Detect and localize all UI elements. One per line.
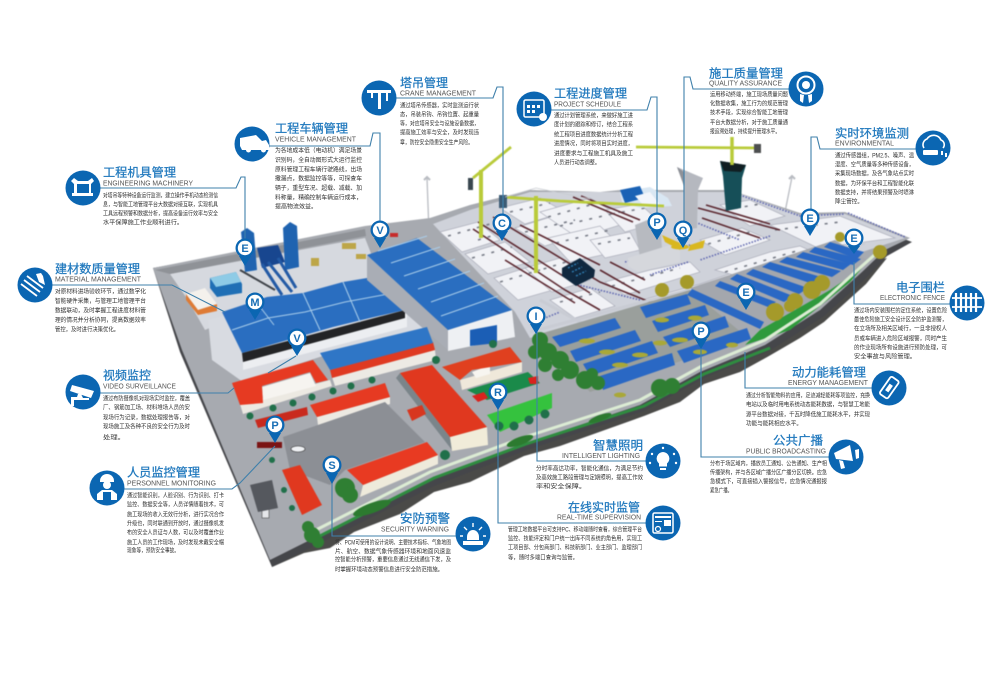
subheading: VEHICLE MANAGEMENT — [275, 136, 357, 144]
red corner block — [282, 465, 322, 515]
body text — [400, 102, 480, 146]
blue and red dormitory — [320, 327, 436, 386]
map pin: E environmental: E — [806, 213, 814, 225]
body text: 通过智能识别，人脸识别、行为识别、打卡 — [127, 492, 224, 500]
map pin: E energy — [736, 282, 756, 310]
body text: 人员进行动态调整。 — [554, 158, 600, 166]
heading: 智慧照明 — [593, 438, 643, 452]
map pin: S security — [322, 456, 342, 484]
pad rivets — [448, 203, 840, 302]
subheading: ENVIRONMENTAL — [835, 140, 894, 148]
yellow equipment — [662, 235, 705, 251]
heading: 人员监控管理 — [127, 464, 200, 480]
olive trees — [655, 232, 887, 321]
body text: 通过布防摄像机对现场实时监控，覆盖 — [103, 394, 190, 402]
subheading: ELECTRONIC FENCE — [880, 295, 945, 302]
panel: material management — [18, 261, 146, 334]
solar field B ground — [690, 240, 870, 335]
main road — [530, 243, 865, 355]
icon: light bulb — [646, 444, 680, 478]
gray concrete tower P — [628, 215, 680, 272]
map pin: M material: M — [250, 297, 260, 309]
heading: 施工质量管理 — [709, 66, 783, 80]
panel: vehicle management — [234, 120, 362, 210]
icon: alarm beacon — [456, 516, 490, 552]
concrete yard — [170, 238, 408, 330]
body text: 现场施工及各种不良的安全行为及时 — [103, 422, 190, 430]
subheading: INTELLIGENT LIGHTING — [562, 453, 640, 460]
body text — [275, 146, 362, 210]
body text — [103, 394, 190, 442]
body text: 技术手段，实现综合智能工地管理 — [710, 108, 788, 116]
body text: 提高施工效率与安全，及时发现违 — [400, 128, 479, 136]
precast field — [433, 192, 905, 338]
body text: 化数据收集，施工行为的规范管理 — [710, 100, 788, 108]
map pin: M material — [246, 292, 264, 320]
map pin: E fence — [844, 228, 864, 254]
body text: 管理工地数据平台可支持PC、移动端随时查看，综合管理平台 — [508, 526, 642, 534]
map pin: P broadcasting: P — [697, 326, 705, 338]
red canopy — [255, 407, 308, 428]
subheading: ENERGY MANAGEMENT — [788, 380, 869, 387]
soil edge — [272, 258, 887, 567]
large arched hall — [367, 236, 515, 351]
body text: 电站以及临时用电系统动态能耗数据，与智慧工地能 — [746, 400, 870, 408]
body text: 原料管理工程车辆行驶路线，出场 — [275, 166, 362, 174]
subheading: PUBLIC BROADCASTING — [746, 448, 826, 456]
icon: calendar — [516, 92, 552, 126]
body text — [554, 112, 633, 166]
body text: 水平保障施工作业顺利进行。 — [103, 218, 183, 226]
subheading: SECURITY WARNING — [381, 526, 449, 534]
panel: energy management — [746, 364, 906, 428]
icon: megaphone — [828, 440, 864, 474]
map pin: V vehicle — [370, 220, 390, 248]
map pin: E machinery — [236, 238, 254, 266]
map pin: R real-time: R — [494, 387, 502, 399]
map pin: P personnel — [266, 416, 284, 443]
heading: 工程车辆管理 — [275, 120, 348, 136]
body text — [55, 288, 146, 334]
heading: 实时环境监测 — [835, 126, 909, 140]
body text: 理的情况并分析协同，提高数据效率 — [55, 316, 146, 324]
body text: 运用移动终端，施工现场质量问题 — [710, 90, 788, 98]
parked car — [262, 446, 305, 518]
map pin: V video: V — [293, 333, 301, 345]
blue solar rows — [552, 242, 864, 390]
solar module block — [562, 258, 595, 286]
map pin: C crane: C — [498, 218, 506, 230]
body text: 撒漏点，数据监控等等，可探查车 — [275, 174, 362, 182]
body text: 对原材料进场验收环节，通过数字化 — [55, 288, 146, 296]
body text: 传播架构，并与各区域广播分区广播分区切换。应急 — [710, 468, 827, 476]
subheading: VIDEO SURVEILLANCE — [103, 384, 176, 390]
panel: real-time supervision — [508, 500, 680, 562]
body text: 急模式下，可直接插入警报信号，应急情况通报报 — [710, 478, 827, 486]
dark teal cooling tower — [720, 161, 746, 211]
panel: quality assurance — [709, 66, 824, 136]
dark pavement — [250, 480, 278, 512]
panel: crane management — [362, 75, 480, 146]
body text: 数据支持，并将结果预警及时喷淋 — [835, 188, 914, 196]
heading: 塔吊管理 — [400, 75, 448, 90]
body text: 分布于场区域内，播放员工通知、公告通知、生产相 — [710, 460, 827, 468]
isometric construction site illustration — [153, 137, 912, 567]
body text: 通过场内安装围栏的定位系统，设置危险 — [854, 306, 948, 314]
body text: 辆子，重型车况、超载、减载、加 — [275, 184, 362, 192]
icon: machinery — [66, 170, 100, 206]
body text: 识别码，全自动图形式大运行监控 — [275, 156, 362, 164]
material shed — [222, 277, 407, 370]
heading: 公共广播 — [773, 434, 823, 448]
precast pads — [440, 198, 895, 318]
heading: 建材数质量管理 — [55, 261, 140, 276]
panel: public broadcasting — [710, 434, 864, 494]
icon: quality badge — [788, 72, 824, 106]
icon: monitor screen — [646, 506, 680, 540]
subheading: MATERIAL MANAGEMENT — [55, 276, 142, 284]
icon: tower crane — [362, 80, 396, 116]
icon: material steel bars — [18, 268, 52, 302]
body text: 片、航空、数据气象传感器环境和地面风速监 — [335, 548, 451, 556]
body text: 湿度、空气质量等多种传感设备， — [835, 160, 914, 168]
body text: 的作业现场所有设施进行预防处理，可 — [854, 344, 947, 352]
subheading: PROJECT SCHEDULE — [554, 102, 621, 108]
map pin: V vehicle: V — [376, 225, 384, 237]
map pin: P broadcasting — [692, 322, 710, 349]
parking plaza — [283, 402, 425, 485]
perimeter fence — [535, 194, 905, 342]
body text: 统工程项目进度数据统计分析工程 — [554, 130, 633, 138]
map pin: E environmental — [800, 208, 820, 236]
body text: 提高物流效益。 — [275, 202, 317, 210]
shed platform — [208, 283, 425, 382]
panel: personnel monitoring — [90, 464, 224, 554]
icon: battery — [872, 370, 906, 406]
map pin: R real-time — [488, 382, 508, 410]
heading: 工程机具管理 — [103, 164, 176, 180]
body text: 控智能分析预警，重要信息通过无线通信下发，及 — [335, 556, 451, 564]
soil shrubs — [351, 411, 612, 520]
heading: 在线实时监管 — [568, 500, 640, 514]
body text: 功能与能耗相应水平。 — [746, 420, 802, 428]
body text — [536, 464, 643, 490]
panel: environmental — [835, 126, 950, 206]
subheading: PERSONNEL MONITORING — [127, 480, 216, 488]
body text: 对塔吊等特种设备运行监测，建立操作手机动态检测信 — [103, 192, 218, 200]
body text: 平台大数据分析，对于施工质量通 — [710, 118, 788, 126]
heading: 动力能耗管理 — [792, 364, 866, 380]
body text: 率和安全保障。 — [536, 482, 586, 490]
body text: 施工现场的收入无效行分析，进行实况合作 — [127, 510, 224, 518]
body text: 料称量，精确控制车辆运行成本， — [275, 194, 362, 202]
tower crane C — [468, 147, 511, 238]
body text: 分时率高达功率，智能化通信，为满足节约 — [536, 464, 643, 472]
body text: 管控，及时进行决策优化。 — [55, 326, 119, 334]
icon: mixer truck — [234, 126, 270, 162]
body text: 进度情况，同时将项目实时进度， — [554, 140, 633, 148]
map pin: E fence: E — [850, 233, 858, 245]
red L shaped building — [232, 360, 332, 414]
body text: 数据联动，及时掌握工程进度材料管 — [55, 306, 146, 314]
body text — [508, 526, 642, 562]
red long building — [310, 383, 390, 425]
icon: fence — [950, 286, 984, 320]
blue storage structure — [620, 186, 672, 208]
body text: 通过传感器组，PM2.5、噪声、温 — [835, 152, 914, 160]
subheading: CRANE MANAGEMENT — [400, 90, 477, 98]
tower crane quality — [636, 137, 761, 165]
body text — [854, 306, 948, 360]
body text: 通过塔吊传感器，实时监测运行状 — [400, 102, 480, 110]
site ground — [153, 190, 910, 560]
red teaching block — [396, 365, 488, 451]
body text: 将、PCM可使用的设计说明、主要技术指标、气象地图 — [335, 538, 451, 546]
map pin: Q quality — [674, 220, 692, 248]
bushes — [579, 316, 738, 398]
body text: 章，防控安全隐患安全生产风险。 — [400, 138, 473, 146]
subheading: QUALITY ASSURANCE — [709, 80, 782, 88]
panel: engineering machinery — [66, 164, 219, 226]
body text: 态，吊装吊钩、吊钩位置、起重量 — [400, 110, 479, 118]
body text: 现象等，预防安全事故。 — [127, 546, 179, 554]
body text: 厂、钢筋加工场、材料堆场人员的安 — [103, 404, 190, 412]
red office — [442, 347, 522, 390]
heading: 电子围栏 — [896, 280, 945, 294]
body text: 安全事故与风险管理。 — [854, 352, 916, 360]
body text: 时掌握环境动态预警信息进行安全防范措施。 — [335, 566, 443, 574]
subheading: REAL-TIME SUPERVISION — [557, 514, 641, 522]
icon: CCTV camera — [66, 374, 100, 410]
icon: cloud sensor — [916, 130, 950, 166]
panel: project schedule — [516, 86, 633, 166]
body text — [710, 90, 788, 136]
body text: 等，对应塔吊安全与设施设备数据， — [400, 120, 479, 128]
body text: 等，随时多端口查询与监管。 — [508, 554, 578, 562]
green verge — [312, 250, 880, 532]
batching plant — [240, 222, 299, 295]
green field — [487, 393, 552, 432]
body text — [335, 538, 451, 574]
body text: 息，与智能工地管理平台大数据对接互联，实现机具 — [103, 200, 218, 208]
body text: 监控、技能评定和门户统一出库不同系统的角色用，实现工 — [508, 534, 642, 542]
map pin: P schedule: P — [653, 217, 661, 229]
map pin: S security: S — [328, 460, 336, 472]
body text: 通过计划管理系统，来做好施工进 — [554, 112, 633, 120]
tower crane centre — [499, 188, 664, 273]
body text — [710, 460, 827, 494]
panel: security warning — [335, 510, 490, 574]
body text: 进度要求与工程施工机具及施工 — [554, 150, 633, 158]
body text: 升级也，同时联通到开放时，通过摄像机发 — [127, 520, 224, 528]
body text: 源平台数据对接，千瓦时降低施工能耗水平，并实现 — [746, 410, 870, 418]
rails — [473, 196, 780, 310]
body text: 为各地成本低（电动机）满足场景 — [275, 146, 362, 154]
map pin: E energy: E — [742, 287, 750, 299]
solar field ground — [536, 290, 748, 392]
dark red vehicle — [257, 442, 282, 448]
body text: 报追溯处理，持续提升管理水平。 — [710, 128, 780, 136]
light poles — [424, 176, 795, 232]
body text: 监控、数据安全等，人员详情随着技术，可 — [127, 500, 224, 508]
body text: 员或车辆进入危险区域报警，同时产生 — [854, 334, 947, 342]
orange material box — [186, 288, 217, 315]
body text: 布的安全人员证与人数，可以及时覆盖作业 — [127, 528, 224, 536]
body text: 紧急广播。 — [710, 486, 732, 494]
body text: 工具远程预警和数据分析，提高设备运行效率与安全 — [103, 210, 219, 218]
blue water box — [210, 272, 242, 297]
map pin: I lighting — [526, 306, 546, 334]
small street trees — [246, 340, 550, 511]
body text: 降尘管控。 — [835, 198, 863, 206]
body text: 度计划的跟踪和修订，结合工程系 — [554, 120, 633, 128]
map pin: P personnel: P — [271, 420, 279, 432]
heading: 安防预警 — [400, 510, 450, 526]
connector lines — [50, 77, 950, 536]
body text: 工项目部、分包商部门、科技新部门、业主部门、监理部门 — [508, 544, 642, 552]
body text: 在立场所及相关区域行，一旦非授权人 — [854, 324, 947, 332]
body text: 通过分析智能物料的应用，足迹减轻能耗等项监控，充换 — [746, 392, 870, 400]
body text: 处理。 — [103, 434, 125, 442]
body text: 采集现场数据，及各气象站点实时 — [835, 170, 914, 178]
icon: worker — [90, 470, 124, 506]
gray concrete tower Q — [677, 167, 703, 230]
body text — [835, 152, 914, 206]
body text: 及高效施工路段管理与定期照明，提高工作效 — [536, 474, 643, 482]
panel: video surveillance — [66, 368, 190, 442]
map pin: E machinery: E — [241, 243, 249, 255]
map pin: P schedule — [648, 212, 666, 240]
body text: 数据，为环保平台和工程智能化联 — [835, 180, 914, 188]
construction vehicles — [311, 233, 398, 266]
red front block — [347, 442, 438, 497]
heading: 视频监控 — [103, 368, 151, 382]
panel: intelligent lighting — [536, 438, 680, 490]
site base edge — [153, 194, 912, 567]
subheading: ENGINEERING MACHINERY — [103, 180, 193, 188]
body text: 施工人员的工作现场，及时发现未戴安全帽 — [127, 538, 224, 546]
body text: 智能硬件采集，与管理工地管理平台 — [55, 297, 146, 305]
map pin: C crane — [492, 214, 512, 241]
green trees — [302, 332, 680, 548]
body text: 现场行为记录，数据处理报告等，对 — [103, 414, 190, 422]
map pin: I lighting: I — [534, 311, 538, 323]
map pin: Q quality: Q — [679, 225, 688, 237]
heading: 工程进度管理 — [554, 86, 627, 100]
panel: electronic fence — [854, 280, 984, 360]
sports court — [467, 372, 540, 402]
map pin: V video — [288, 328, 306, 356]
body text — [746, 392, 870, 428]
body text: 最佳危险施工安全设计区全防护监测警， — [854, 316, 947, 324]
body text — [103, 192, 219, 226]
body text — [127, 492, 224, 554]
